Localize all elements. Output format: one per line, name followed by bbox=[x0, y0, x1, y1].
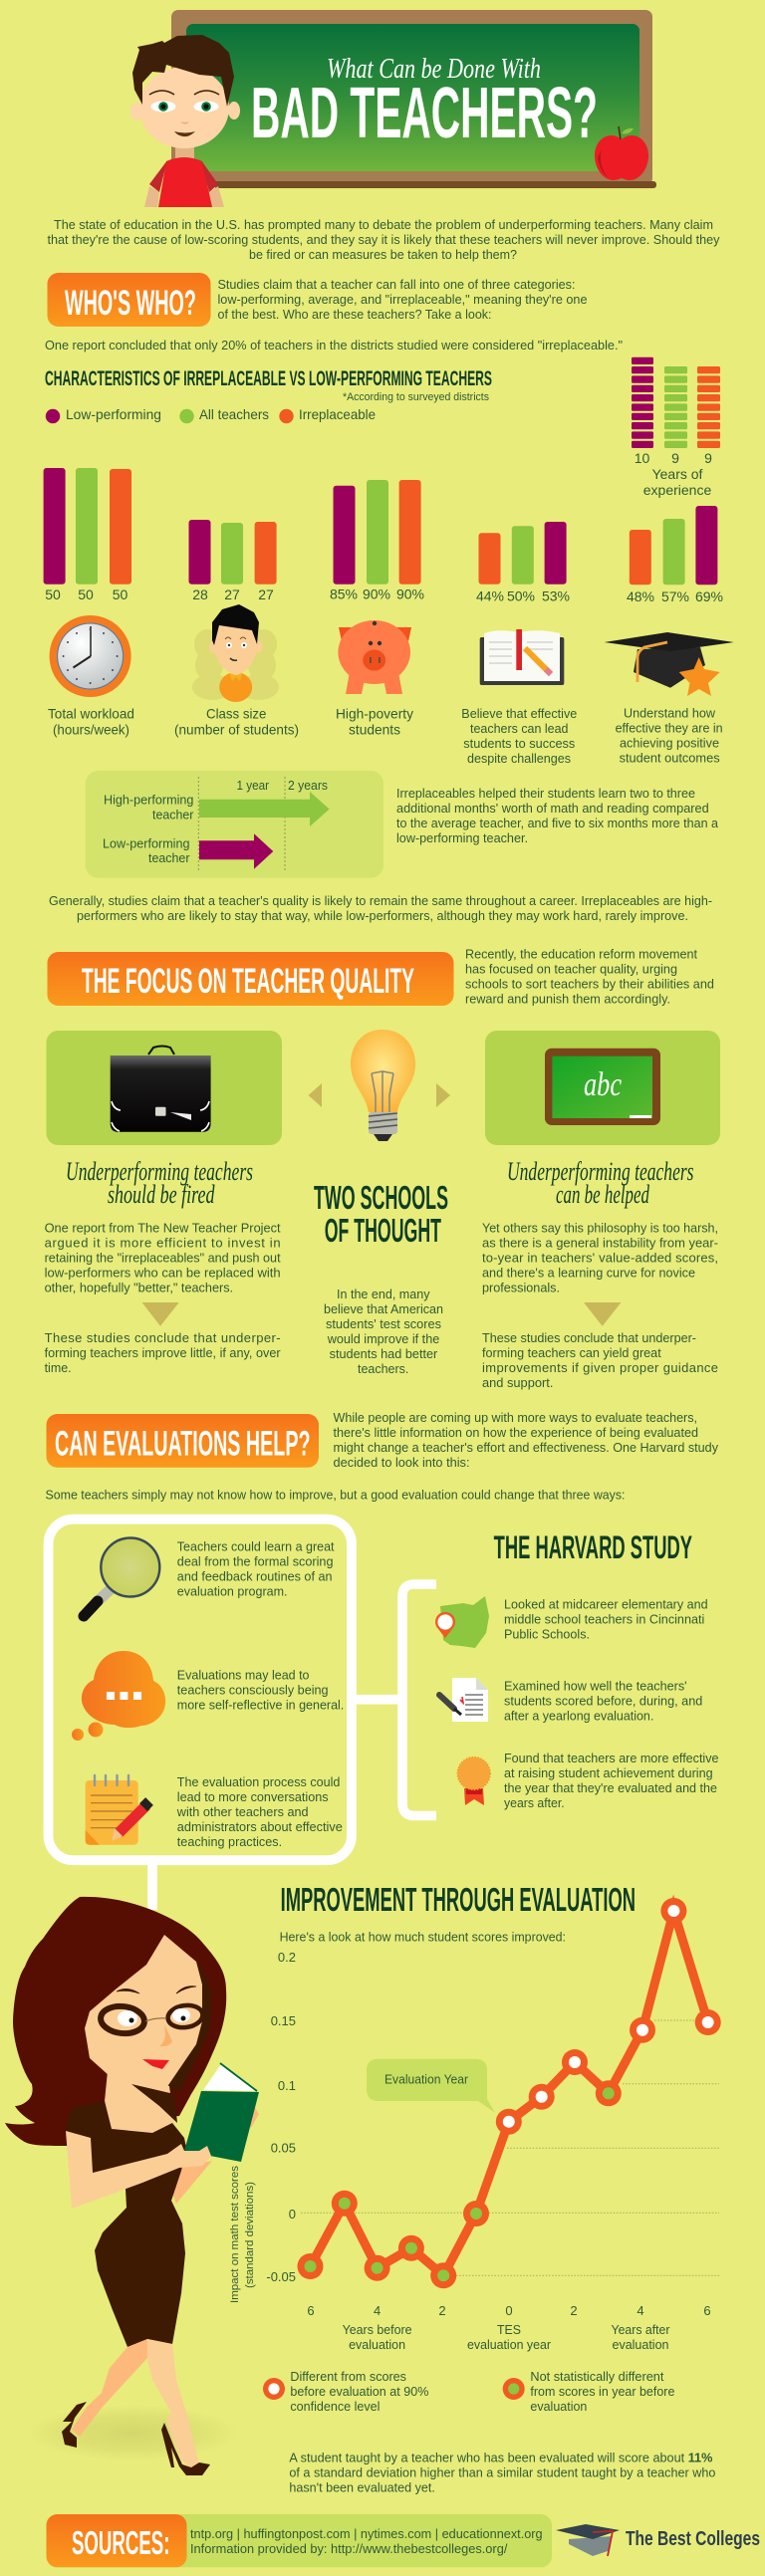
bar chart: high-poverty: 90% bbox=[363, 586, 390, 602]
captions: understanding: student outcomes bbox=[620, 751, 720, 765]
study text: cincinnati: Public Schools. bbox=[504, 1627, 590, 1642]
left argument text: other, hopefully "better," teachers. bbox=[45, 1281, 233, 1294]
subheading: should be fired bbox=[66, 1157, 253, 1209]
x axis numbers: 6 bbox=[703, 2303, 711, 2318]
right argument text: Yet others say this philosophy is too harsh, bbox=[482, 1221, 718, 1236]
irreplaceables text: Irreplaceables helped their students learn two to three bbox=[396, 786, 695, 801]
captions: belief: students to success bbox=[463, 736, 576, 751]
heading: can evaluations help bbox=[46, 1414, 319, 1468]
front leg bbox=[147, 2339, 199, 2467]
center conclusion text bbox=[324, 1287, 443, 1376]
legend: not significant: evaluation bbox=[530, 2399, 587, 2414]
icon: magnifying glass bbox=[84, 1537, 159, 1616]
bar chart: beliefs bbox=[476, 522, 570, 604]
title script line: What Can be Done With bbox=[327, 53, 541, 85]
text: conversations: lead to more conversations bbox=[177, 1789, 329, 1804]
text: formal scoring: deal from the formal scoring bbox=[177, 1554, 333, 1569]
y axis labels: 0 bbox=[289, 2207, 296, 2222]
right argument text: professionals. bbox=[482, 1281, 560, 1294]
legend: not significant: Not statistically different bbox=[530, 2369, 664, 2384]
chart footnote: *According to surveyed districts bbox=[343, 391, 489, 403]
center conclusion text: would improve if the bbox=[327, 1331, 439, 1346]
footer: sources: SOURCES: bbox=[72, 2524, 169, 2561]
chart legend: All teachers bbox=[199, 406, 269, 422]
axis title: (standard deviations) bbox=[244, 2182, 256, 2288]
chalkboard surface bbox=[186, 24, 639, 171]
bar chart: understanding: 48% bbox=[627, 588, 654, 604]
captions: workload: Total workload bbox=[48, 706, 134, 722]
captions: belief: Believe that effective bbox=[461, 706, 577, 721]
captions: class size: Class size bbox=[206, 706, 267, 722]
who's who text: low-performing, average, and "irreplaceable," meaning they're one bbox=[217, 292, 588, 307]
bar chart: beliefs: 44% bbox=[476, 588, 504, 604]
right argument text: and there's a learning curve for novice bbox=[482, 1266, 695, 1281]
arrow: low-performing bbox=[199, 833, 273, 869]
icon: clock bbox=[50, 615, 131, 697]
study text: found: years after. bbox=[504, 1795, 565, 1810]
x axis numbers: 2 bbox=[570, 2303, 578, 2318]
right conclusion text: forming teachers can yield great bbox=[482, 1345, 661, 1360]
captions: understanding: achieving positive bbox=[620, 735, 719, 751]
heading: focus on teacher quality: THE FOCUS ON TEACHER QUALITY bbox=[82, 962, 414, 1001]
back hair bbox=[5, 1897, 226, 2146]
x axis numbers: 4 bbox=[374, 2303, 381, 2318]
front shoe bbox=[161, 2423, 210, 2475]
evaluations text: there's little information on how the experience of being evaluated bbox=[333, 1425, 698, 1440]
legend: significant bbox=[263, 2369, 429, 2414]
text: conversations: teaching practices. bbox=[177, 1834, 282, 1849]
center conclusion text: students had better bbox=[330, 1346, 438, 1361]
study text: examined bbox=[504, 1679, 702, 1723]
arrow: high-performing bbox=[199, 792, 330, 826]
x axis numbers bbox=[307, 2303, 711, 2318]
callout: evaluation year bbox=[367, 2059, 495, 2113]
text: formal scoring: evaluation program. bbox=[177, 1584, 287, 1599]
chart: years of experience: 9 bbox=[704, 450, 712, 466]
focus text: reward and punish them accordingly. bbox=[465, 992, 670, 1007]
bar chart: understanding: 69% bbox=[695, 588, 723, 604]
footer: sources bbox=[46, 2514, 552, 2567]
connector bracket bbox=[152, 1584, 436, 1910]
x axis group labels: TES bbox=[497, 2322, 521, 2337]
x axis group labels: evaluation year bbox=[467, 2337, 552, 2352]
icon: graduation cap and star bbox=[605, 632, 734, 696]
captions: belief: despite challenges bbox=[467, 751, 571, 766]
text: self-reflective: teachers consciously being bbox=[177, 1683, 329, 1698]
front arm and hand bbox=[66, 2131, 211, 2209]
face bbox=[85, 1935, 202, 2088]
text: formal scoring: Teachers could learn a great bbox=[177, 1539, 335, 1554]
panel: learning arrows: Low-performing bbox=[103, 836, 189, 851]
left conclusion text: forming teachers improve little, if any, over bbox=[45, 1345, 281, 1360]
panel: learning arrows: 2 years bbox=[288, 778, 328, 793]
icon: document and pen bbox=[439, 1678, 488, 1722]
study text: examined: students scored before, during, and bbox=[504, 1694, 702, 1709]
captions: poverty bbox=[336, 706, 413, 738]
back leg bbox=[72, 2339, 147, 2437]
study text: examined: after a yearlong evaluation. bbox=[504, 1709, 653, 1723]
panel: chalkboard abc: abc bbox=[584, 1066, 622, 1103]
panel: chalkboard abc bbox=[485, 1031, 720, 1145]
line chart: improvement bbox=[229, 1898, 721, 2352]
back shoe bbox=[62, 2402, 87, 2448]
bar chart: workload: 50 bbox=[78, 586, 94, 602]
left argument text: argued it is more efficient to invest in bbox=[45, 1236, 281, 1251]
text: conversations: The evaluation process could bbox=[177, 1774, 340, 1789]
panel: learning arrows: 1 year bbox=[237, 778, 270, 793]
x axis group labels: Years after bbox=[612, 2322, 670, 2337]
intro paragraph: that they're the cause of low-scoring students, and they say it is likely that these teachers will never improve. Should they bbox=[48, 232, 720, 247]
triangle: left bbox=[141, 1302, 179, 1326]
irreplaceables text bbox=[396, 786, 719, 845]
inner dark hair bbox=[166, 1960, 211, 2091]
text: self-reflective: more self-reflective in general. bbox=[177, 1698, 344, 1713]
back arm bbox=[171, 2161, 212, 2204]
captions: class size: (number of students) bbox=[174, 722, 299, 738]
irreplaceables text: additional months' worth of math and reading compared bbox=[396, 801, 709, 816]
focus text bbox=[465, 947, 714, 1007]
study text: cincinnati: Looked at midcareer elementary and bbox=[504, 1597, 708, 1612]
takeaway text bbox=[289, 2451, 715, 2495]
panel: learning arrows: High-performing bbox=[104, 793, 193, 808]
study text: found bbox=[504, 1751, 719, 1810]
bar chart: understanding: 57% bbox=[661, 588, 689, 604]
icon: notepad and pencil bbox=[86, 1775, 149, 1845]
evaluations text: decided to look into this: bbox=[333, 1455, 470, 1470]
who's who text: of the best. Who are these teachers? Take a look: bbox=[217, 307, 492, 322]
chalk ledge bbox=[214, 181, 656, 188]
text: conversations: with other teachers and bbox=[176, 1804, 309, 1819]
evaluations text bbox=[333, 1410, 718, 1470]
study text: cincinnati bbox=[504, 1597, 708, 1642]
heading: who's who: WHO'S WHO? bbox=[65, 284, 196, 323]
center conclusion text: believe that American bbox=[324, 1301, 443, 1316]
report sentence: One report concluded that only 20% of teachers in the districts studied were considered "irreplaceable." bbox=[45, 338, 623, 352]
x axis numbers: 4 bbox=[637, 2303, 644, 2318]
right argument text: to-year in teachers' value-added scores, bbox=[482, 1251, 718, 1266]
left conclusion text: These studies conclude that underper- bbox=[45, 1330, 281, 1345]
left argument text: low-performers who can be replaced with bbox=[45, 1266, 281, 1281]
left argument text: retaining the "irreplaceables" and push out bbox=[45, 1251, 281, 1266]
x axis group labels: Years before bbox=[343, 2322, 412, 2337]
icon: book and pencil bbox=[480, 629, 564, 685]
generally text: performers who are likely to stay that way, while low-performers, although they may work hard, rarely improve. bbox=[77, 908, 688, 923]
captions: understanding: Understand how bbox=[624, 705, 716, 721]
icon: ohio map pin bbox=[435, 1596, 489, 1648]
icon: apple bbox=[595, 126, 648, 180]
chart intro: Here's a look at how much student scores improved: bbox=[280, 1929, 566, 1944]
focus text: has focused on teacher quality, urging bbox=[465, 962, 677, 977]
center conclusion text: In the end, many bbox=[337, 1287, 430, 1301]
glasses and eyes bbox=[100, 2003, 204, 2035]
eyebrows bbox=[117, 1987, 196, 1993]
study text: found: the year that they're evaluated and the bbox=[504, 1780, 717, 1795]
legend: not significant: from scores in year before bbox=[530, 2384, 674, 2399]
legend: significant: Different from scores bbox=[290, 2369, 406, 2384]
bar chart: high-poverty: 85% bbox=[330, 586, 358, 602]
icon: student bbox=[192, 604, 279, 702]
evaluations text: While people are coming up with more ways to evaluate teachers, bbox=[333, 1410, 697, 1425]
captions: poverty: High-poverty bbox=[336, 706, 413, 722]
lips bbox=[142, 2059, 169, 2069]
bar chart: high-poverty bbox=[330, 480, 424, 602]
subheading: should be fired: Underperforming teachers bbox=[66, 1157, 253, 1186]
bar chart: workload: 50 bbox=[45, 586, 61, 602]
subheading: should be fired: should be fired bbox=[108, 1180, 215, 1209]
text: conversations: administrators about effective bbox=[177, 1819, 343, 1834]
left conclusion text: time. bbox=[45, 1360, 72, 1375]
chart: years of experience: 9 bbox=[671, 450, 679, 466]
panel: three ways bbox=[48, 1520, 352, 1860]
icon: thought cloud bbox=[72, 1651, 165, 1741]
bar chart: workload bbox=[44, 468, 131, 602]
who's who text: Studies claim that a teacher can fall into one of three categories: bbox=[217, 277, 576, 292]
left conclusion text bbox=[45, 1330, 281, 1375]
panel: learning arrows: teacher bbox=[152, 808, 194, 822]
legend: significant: confidence level bbox=[290, 2399, 381, 2414]
study text: found: at raising student achievement during bbox=[504, 1765, 713, 1780]
x axis numbers: 6 bbox=[307, 2303, 315, 2318]
focus text: Recently, the education reform movement bbox=[465, 947, 697, 962]
neck and chest bbox=[105, 2071, 174, 2136]
generally text bbox=[49, 893, 712, 923]
subheading: can be helped bbox=[507, 1157, 693, 1209]
text: self-reflective: Evaluations may lead to bbox=[177, 1668, 309, 1683]
takeaway text: A student taught by a teacher who has been evaluated will score about 11% bbox=[289, 2451, 713, 2465]
dress top bbox=[65, 2101, 186, 2183]
intro paragraph bbox=[48, 217, 720, 262]
who's who text bbox=[217, 277, 588, 322]
chart: years of experience: Years of bbox=[652, 466, 703, 482]
y axis labels: 0.1 bbox=[278, 2078, 296, 2093]
heading: can evaluations help: CAN EVALUATIONS HELP? bbox=[55, 1425, 311, 1464]
irreplaceables text: low-performing teacher. bbox=[396, 830, 528, 845]
chart legend bbox=[46, 406, 376, 423]
center conclusion text: students' test scores bbox=[326, 1316, 441, 1331]
x axis group labels: evaluation bbox=[349, 2337, 405, 2352]
y axis labels: 0.05 bbox=[271, 2141, 296, 2155]
right conclusion text: These studies conclude that underper- bbox=[482, 1330, 696, 1345]
bar chart: beliefs: 50% bbox=[507, 588, 535, 604]
heading: who's who bbox=[48, 273, 211, 327]
center conclusion text: teachers. bbox=[358, 1361, 408, 1376]
study text: examined: Examined how well the teachers' bbox=[504, 1679, 687, 1694]
x axis group labels bbox=[343, 2322, 670, 2352]
captions: workload bbox=[48, 706, 134, 738]
x axis numbers: 0 bbox=[505, 2303, 513, 2318]
right argument text bbox=[482, 1221, 718, 1294]
text: formal scoring: and feedback routines of an bbox=[177, 1569, 333, 1584]
bar chart: high-poverty: 90% bbox=[396, 586, 424, 602]
study text: found: Found that teachers are more effective bbox=[504, 1751, 719, 1765]
bar chart: beliefs: 53% bbox=[542, 588, 570, 604]
heading: focus on teacher quality bbox=[48, 952, 454, 1006]
bar chart: class size: 27 bbox=[224, 586, 240, 602]
chart: years of experience bbox=[632, 357, 720, 498]
captions: poverty: students bbox=[349, 722, 400, 738]
header: chalkboard title bbox=[130, 10, 656, 207]
y axis labels: 0.2 bbox=[278, 1950, 296, 1965]
right conclusion text: improvements if given proper guidance bbox=[482, 1360, 718, 1375]
legend: not significant bbox=[503, 2369, 674, 2414]
left argument text: One report from The New Teacher Project bbox=[45, 1221, 281, 1236]
icon: boy character bbox=[130, 35, 240, 207]
data points bbox=[297, 1898, 721, 2288]
triangle: right bbox=[584, 1302, 622, 1326]
three ways sentence: Some teachers simply may not know how to improve, but a good evaluation could change that three ways: bbox=[46, 1488, 626, 1503]
right argument text: as there is a general instability from year- bbox=[482, 1236, 718, 1251]
chalkboard frame bbox=[171, 10, 652, 185]
subheading: can be helped: can be helped bbox=[556, 1180, 650, 1209]
text: self-reflective bbox=[177, 1668, 344, 1713]
data line bbox=[311, 1911, 708, 2275]
chart legend: Low-performing bbox=[66, 406, 161, 422]
chart legend: Irreplaceable bbox=[299, 406, 376, 422]
right conclusion text: and support. bbox=[482, 1375, 553, 1390]
footer: sources: tntp.org | huffingtonpost.com | nytimes.com | educationnext.org bbox=[190, 2526, 543, 2541]
captions: understanding bbox=[616, 705, 723, 765]
panel: learning arrows bbox=[86, 771, 383, 878]
heading: two schools of thought bbox=[314, 1179, 448, 1249]
book bbox=[184, 2063, 259, 2162]
text: conversations bbox=[176, 1774, 343, 1849]
bar chart: class size: 27 bbox=[258, 586, 274, 602]
bar chart: workload: 50 bbox=[113, 586, 128, 602]
icon: medal bbox=[457, 1757, 490, 1805]
icon: piggy bank bbox=[338, 620, 411, 694]
takeaway text: hasn't been evaluated yet. bbox=[289, 2480, 435, 2495]
heading: two schools of thought: OF THOUGHT bbox=[325, 1212, 441, 1249]
nose bbox=[159, 2024, 172, 2046]
captions: workload: (hours/week) bbox=[53, 722, 129, 738]
bar chart: understanding bbox=[627, 506, 723, 604]
text: formal scoring bbox=[177, 1539, 335, 1599]
captions: belief bbox=[461, 706, 577, 766]
floor shadow bbox=[28, 2405, 237, 2460]
right conclusion text bbox=[482, 1330, 718, 1390]
icon: light bulb bbox=[351, 1030, 415, 1141]
callout: evaluation year: Evaluation Year bbox=[384, 2072, 469, 2087]
evaluations text: might change a teacher's effort and effectiveness. One Harvard study bbox=[333, 1440, 718, 1455]
y axis labels: -0.05 bbox=[266, 2269, 296, 2284]
y axis labels: 0.15 bbox=[271, 2013, 296, 2028]
x axis group labels: evaluation bbox=[612, 2337, 669, 2352]
footer: sources: Information provided by: http://www.thebestcolleges.org/ bbox=[190, 2541, 508, 2556]
generally text: Generally, studies claim that a teacher's quality is likely to remain the same throughout a career. Irreplaceables are high- bbox=[49, 893, 712, 908]
intro paragraph: be fired or can measures be taken to help them? bbox=[249, 247, 517, 262]
study text: cincinnati: middle school teachers in Cincinnati bbox=[504, 1612, 704, 1627]
chart: years of experience: 10 bbox=[635, 450, 649, 466]
chart: years of experience: experience bbox=[643, 482, 711, 498]
bar chart: class size: 28 bbox=[192, 586, 208, 602]
axis title bbox=[229, 2165, 256, 2303]
bar chart: class size bbox=[189, 520, 277, 602]
takeaway text: of a standard deviation higher than a similar student taught by a teacher who bbox=[289, 2465, 715, 2480]
logo: the best colleges bbox=[556, 2524, 760, 2556]
y axis labels bbox=[266, 1950, 296, 2284]
focus text: schools to sort teachers by their abilities and bbox=[465, 977, 714, 992]
intro paragraph: The state of education in the U.S. has prompted many to debate the problem of underperforming teachers. Many claim bbox=[54, 217, 713, 232]
panel: briefcase bbox=[46, 1031, 282, 1145]
illustration: teacher woman reading bbox=[5, 1897, 259, 2475]
captions: belief: teachers can lead bbox=[470, 721, 568, 736]
axis title: Impact on math test scores bbox=[229, 2165, 241, 2303]
panel: learning arrows: teacher bbox=[148, 850, 190, 865]
captions: understanding: effective they are in bbox=[616, 721, 723, 735]
legend: significant: before evaluation at 90% bbox=[290, 2384, 429, 2399]
dress bbox=[93, 2151, 185, 2347]
left argument text bbox=[45, 1221, 281, 1294]
heading: two schools of thought: TWO SCHOOLS bbox=[314, 1179, 448, 1216]
captions: class size bbox=[174, 706, 299, 738]
x axis numbers: 2 bbox=[438, 2303, 446, 2318]
arrow: right bbox=[436, 1083, 450, 1107]
arrow: left bbox=[309, 1083, 322, 1107]
irreplaceables text: to the average teacher, and five to six months more than a bbox=[396, 816, 719, 830]
